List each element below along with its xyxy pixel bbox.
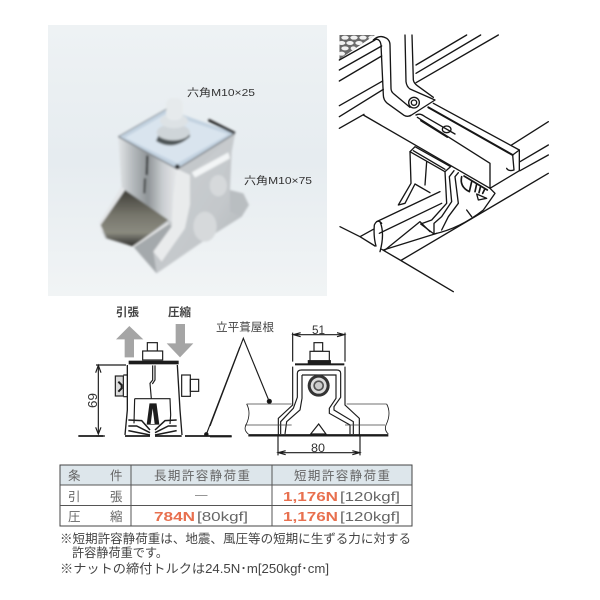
panel: product photo [48, 25, 327, 296]
dimension: 51: 51 [312, 323, 325, 337]
row: tension: 1,176N [283, 489, 338, 504]
diagram: front elevation [78, 324, 240, 436]
label: top bolt: 六角M10×25 [187, 86, 255, 99]
row: compression: [120kgf] [340, 510, 400, 524]
table header: 件 [110, 469, 123, 483]
notes [60, 531, 411, 576]
row: compression: 圧 [68, 510, 81, 524]
dimension: 69: 69 [85, 393, 99, 408]
table header [68, 468, 390, 483]
row: tension: 張 [110, 490, 123, 504]
heading: tension label: 引張 [116, 306, 139, 319]
row: tension: 引 [68, 490, 81, 504]
table header: 短期許容静荷重 [294, 468, 390, 483]
table: allowable static load [60, 465, 412, 526]
table header: 長期許容静荷重 [154, 468, 250, 483]
table header: 条 [68, 469, 81, 483]
row: compression: 縮 [110, 509, 123, 524]
label: roof type: 立平葺屋根 [216, 320, 275, 334]
row: tension [68, 488, 400, 504]
label: side bolt: 六角M10×75 [244, 174, 312, 187]
arrow: compression down [167, 324, 193, 357]
photo: bracket clamp [99, 98, 249, 273]
row: tension: ― [195, 488, 208, 502]
row: compression: 784N [154, 509, 195, 524]
diagram: side elevation [210, 333, 389, 455]
dimension: 80: 80 [311, 441, 325, 455]
notes: ※短期許容静荷重は、地震、風圧等の短期に生ずる力に対する [60, 531, 411, 546]
notes: ※ナットの締付トルクは24.5N･m[250kgf･cm] [60, 562, 329, 576]
row: compression [68, 509, 400, 524]
arrow: tension up [116, 326, 143, 357]
row: compression: 1,176N [283, 509, 338, 524]
perforated panel [340, 35, 375, 59]
clamp [398, 147, 495, 234]
heading: compression label: 圧縮 [168, 305, 191, 319]
row: tension: [120kgf] [340, 490, 400, 504]
notes: 許容静荷重です。 [72, 545, 168, 560]
illustration: installation on standing seam roof [338, 35, 548, 292]
row: compression: [80kgf] [197, 510, 248, 524]
